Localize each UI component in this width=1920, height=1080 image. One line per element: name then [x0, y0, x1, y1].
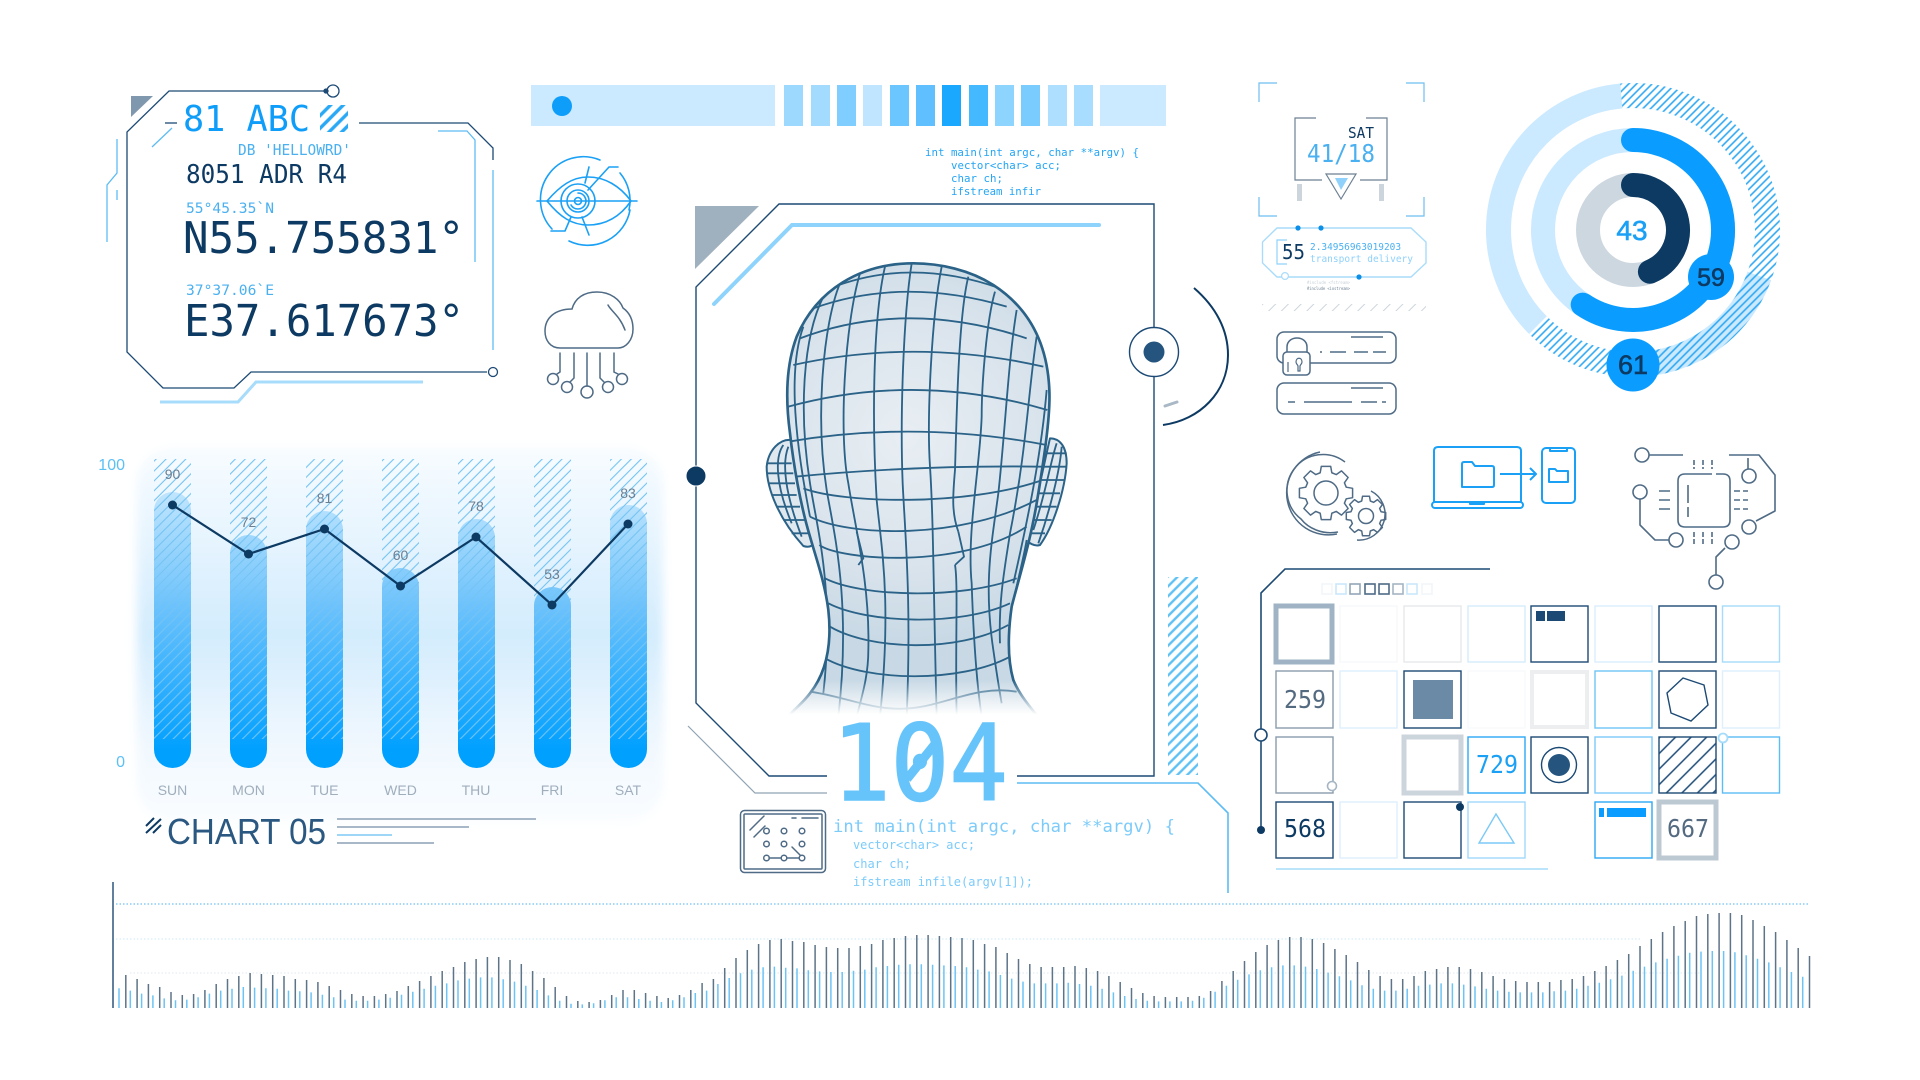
icon: eye [537, 157, 637, 245]
day labels: MON [232, 782, 265, 798]
scan frame [696, 204, 1154, 776]
tag nodes [1282, 225, 1362, 280]
day labels: WED [384, 782, 417, 798]
row 2 cells [1276, 671, 1780, 728]
icon: cloud with circuits [545, 292, 633, 398]
day labels: TUE [310, 782, 338, 798]
middle ring [1543, 140, 1723, 320]
value 41/18: 41/18 [1307, 139, 1375, 168]
axis labels: 100 [98, 457, 125, 474]
waveform dark bars [126, 913, 1810, 1008]
icon: keypad tablet [740, 810, 826, 872]
value labels: 83 [620, 485, 636, 501]
day labels: FRI [541, 782, 563, 798]
label latitude dms: 55°45.35`N [186, 201, 274, 217]
code snippet lower: char ch; [853, 857, 911, 871]
label longitude dms: 37°37.06`E [186, 283, 274, 299]
code snippet top: ifstream infir [951, 185, 1041, 198]
outer gray bracket [688, 726, 827, 793]
tiny code [1307, 280, 1350, 292]
panel: head scan [686, 204, 1228, 893]
value labels: 72 [241, 514, 256, 530]
line series [168, 500, 632, 610]
code snippet lower: int main(int argc, char **argv) { [833, 817, 1175, 837]
lower thick accent line [160, 382, 423, 402]
frame right arc [1163, 288, 1228, 425]
code snippet lower [833, 817, 1175, 889]
frame right node [1130, 328, 1178, 376]
label SAT: SAT [1348, 124, 1374, 142]
panel: transport tag [1262, 225, 1426, 311]
panel: coordinates [107, 85, 498, 402]
grid baseline [1276, 868, 1548, 870]
tiny code: #include <iostream> [1307, 286, 1350, 292]
icon: laptop to phone transfer [1432, 447, 1575, 508]
date box [1295, 118, 1387, 180]
wireframe head [767, 263, 1067, 723]
icon: gears [1287, 452, 1386, 540]
value 667: 667 [1667, 814, 1709, 843]
hatch square [320, 105, 348, 132]
day labels [158, 782, 642, 798]
inner ring [1588, 185, 1678, 275]
waveform light bars [119, 951, 1803, 1008]
value latitude: N55.755831° [183, 213, 464, 264]
blue bracket [1017, 783, 1228, 893]
value 568: 568 [1284, 814, 1326, 843]
value labels: 78 [468, 498, 484, 514]
tiny code: #include <fstream> [1307, 280, 1350, 286]
infographic canvas [99, 82, 1810, 1008]
code snippet lower: vector<char> acc; [853, 838, 975, 852]
chart background [137, 447, 663, 823]
chart title hatch [146, 818, 161, 833]
hatch strip [1262, 304, 1426, 311]
panel: date widget [1259, 83, 1424, 216]
value 43: 43 [1616, 215, 1648, 246]
bar hatching [154, 459, 647, 739]
title 81 ABC: 81 ABC [183, 99, 310, 140]
row 1 cells [1276, 606, 1780, 662]
outer hatched arc [1538, 95, 1768, 364]
label DB HELLOWRD: DB 'HELLOWRD' [238, 141, 351, 159]
row 4 cells [1276, 802, 1716, 858]
day labels: THU [462, 782, 490, 798]
waveform axis [112, 882, 114, 1008]
outer ring [1498, 96, 1768, 364]
frame blue accent [714, 225, 1099, 304]
caption: transport delivery [1310, 254, 1413, 265]
value 55: 55 [1282, 240, 1305, 264]
value 259: 259 [1284, 685, 1326, 714]
inner arc [1633, 185, 1678, 272]
guide lines [116, 904, 1809, 973]
tag bracket [1277, 240, 1287, 264]
icon: login forms with lock [1277, 332, 1396, 414]
icon: circuit chip [1633, 448, 1775, 589]
code snippet top: char ch; [951, 172, 1003, 185]
code snippet top: int main(int argc, char **argv) { [925, 146, 1139, 159]
value labels [165, 466, 636, 582]
small squares row [1322, 584, 1432, 594]
value labels: 60 [393, 547, 408, 563]
coordinates frame outline [127, 85, 498, 388]
code snippet top: vector<char> acc; [951, 159, 1061, 172]
badge 59: 59 [1697, 264, 1725, 292]
value longitude: E37.617673° [184, 296, 464, 347]
badge 61: 61 [1618, 350, 1648, 380]
day labels: SAT [615, 782, 642, 798]
number string: 2.34956963019203 [1310, 242, 1401, 253]
label 8051 ADR R4: 8051 ADR R4 [186, 160, 347, 190]
corner triangle [131, 96, 153, 117]
chart title: CHART 05 [167, 811, 326, 852]
frame left node [686, 466, 706, 486]
day labels: SUN [158, 782, 187, 798]
triangle marker [1326, 174, 1356, 199]
chart title lines [337, 819, 536, 843]
grid rail [1255, 569, 1490, 834]
corner brackets [1259, 83, 1424, 216]
value labels: 90 [165, 466, 180, 482]
panel: bar chart [98, 447, 663, 852]
side hatch strip [1168, 577, 1198, 775]
value 104: 104 [832, 703, 1008, 825]
axis labels [98, 457, 125, 771]
arc small dash [1165, 402, 1177, 406]
frame gray triangle [695, 206, 759, 269]
top segmented bar [531, 85, 1166, 126]
value labels: 81 [317, 490, 332, 506]
panel: data grid [1255, 569, 1780, 869]
value 729: 729 [1476, 750, 1518, 779]
badge 59 [1688, 254, 1734, 300]
code snippet lower: ifstream infile(argv[1]); [853, 875, 1033, 889]
bars [154, 492, 647, 768]
value labels: 53 [544, 566, 560, 582]
axis labels: 0 [116, 754, 125, 771]
coordinates frame accents [107, 128, 493, 350]
gray ticks [1297, 184, 1384, 201]
tag outline [1262, 228, 1426, 277]
panel: donut chart [1498, 95, 1768, 392]
middle arc [1583, 140, 1723, 320]
waveform chart [113, 882, 1810, 1008]
code snippet top [925, 146, 1139, 198]
badge 61 [1606, 338, 1660, 392]
row 3 cells [1276, 734, 1780, 793]
